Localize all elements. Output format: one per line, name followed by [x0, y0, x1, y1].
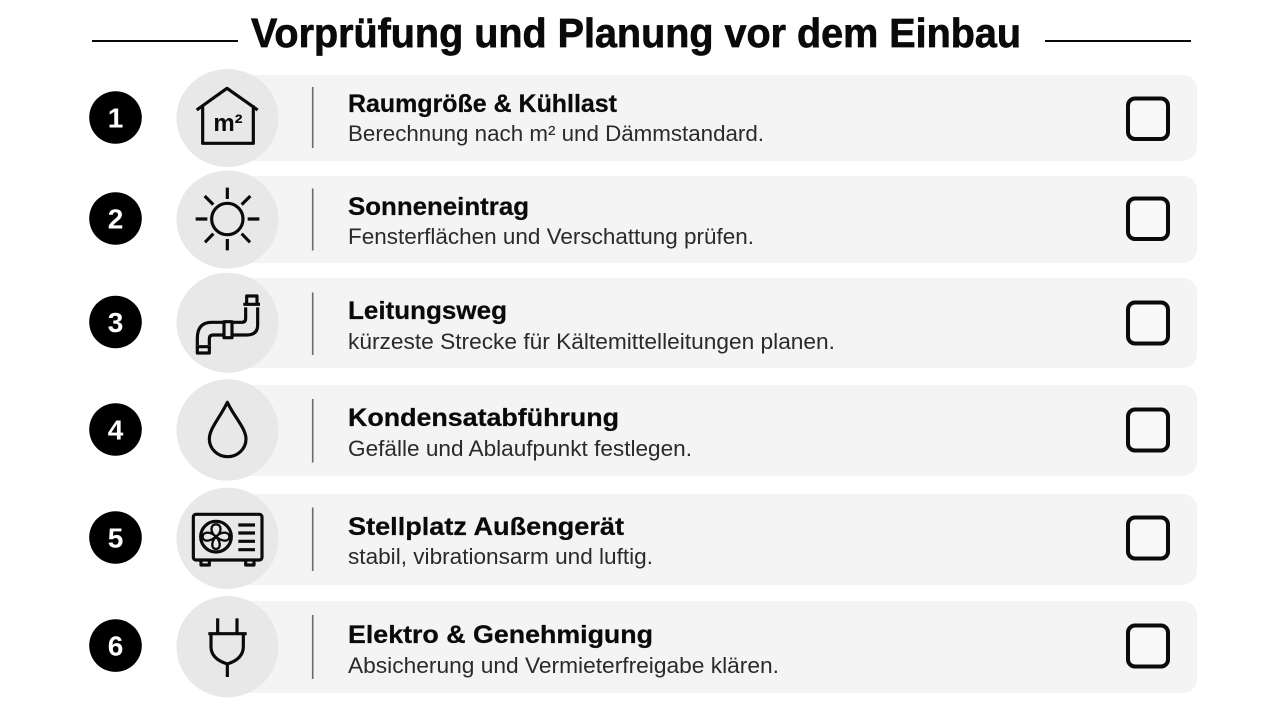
number badge 6	[89, 619, 142, 672]
icon circle 5	[176, 488, 278, 589]
icon: water drop	[209, 402, 246, 457]
heading 6: Elektro & Genehmigung	[348, 621, 653, 649]
divider 2	[312, 188, 314, 250]
icon: house with m²: m²	[213, 110, 243, 137]
number badge 1	[89, 91, 142, 144]
row 2: Sonneneintrag	[89, 170, 1197, 268]
heading 4: Kondensatabführung	[348, 404, 619, 432]
icon: power plug	[208, 618, 247, 677]
checkbox 1	[1128, 98, 1168, 139]
icon circle 2	[176, 170, 278, 268]
heading 5: Stellplatz Außengerät	[348, 513, 625, 541]
number badge 6: 6	[108, 631, 123, 662]
icon circle 1	[176, 69, 278, 167]
description 1: Berechnung nach m² und Dämmstandard.	[348, 121, 764, 146]
heading 2: Sonneneintrag	[348, 193, 529, 221]
divider 6	[312, 615, 314, 679]
heading 1: Raumgröße & Kühllast	[348, 90, 618, 118]
number badge 2	[89, 192, 142, 245]
number badge 1: 1	[108, 102, 123, 134]
icon circle 4	[176, 379, 278, 481]
heading 3: Leitungsweg	[348, 297, 507, 325]
description 5: stabil, vibrationsarm und luftig.	[348, 544, 653, 569]
row 5: Stellplatz Außengerät	[89, 488, 1197, 589]
checkbox 3	[1128, 302, 1168, 344]
panel 6	[225, 601, 1197, 693]
number badge 4: 4	[108, 414, 124, 446]
icon circle 6	[176, 596, 278, 697]
number badge 4	[89, 403, 142, 456]
panel 4	[225, 385, 1197, 476]
row 4: Kondensatabführung	[89, 379, 1197, 481]
number badge 5: 5	[108, 522, 123, 554]
divider 3	[312, 292, 314, 355]
row 1: Raumgröße und Kühllast	[89, 69, 1197, 167]
divider 1	[312, 87, 314, 148]
checkbox 6	[1128, 626, 1168, 666]
panel 5	[225, 494, 1197, 585]
icon: pipe	[196, 296, 260, 353]
panel 3	[225, 278, 1197, 368]
checkbox 2	[1128, 198, 1168, 239]
icon: sun	[196, 188, 259, 250]
icon circle 3	[176, 273, 278, 373]
description 6: Absicherung und Vermieterfreigabe klären.	[348, 653, 779, 678]
number badge 3	[89, 296, 142, 348]
number badge 3: 3	[108, 307, 123, 338]
description 2: Fensterflächen und Verschattung prüfen.	[348, 224, 754, 249]
panel 2	[225, 176, 1197, 263]
panel 1	[225, 75, 1197, 161]
description 4: Gefälle und Ablaufpunkt festlegen.	[348, 436, 692, 461]
divider 5	[312, 508, 314, 571]
title: Vorprüfung und Planung vor dem Einbau	[251, 10, 1021, 56]
row 6: Elektro und Genehmigung	[89, 596, 1197, 697]
icon: house with m²	[197, 88, 258, 143]
icon: outdoor unit	[193, 514, 262, 565]
row 3: Leitungsweg	[89, 273, 1197, 373]
number badge 2: 2	[108, 204, 123, 234]
checkbox 4	[1128, 410, 1168, 450]
checkbox 5	[1128, 518, 1168, 558]
description 3: kürzeste Strecke für Kältemittelleitungen planen.	[348, 329, 835, 354]
divider 4	[312, 399, 314, 462]
number badge 5	[89, 511, 142, 564]
